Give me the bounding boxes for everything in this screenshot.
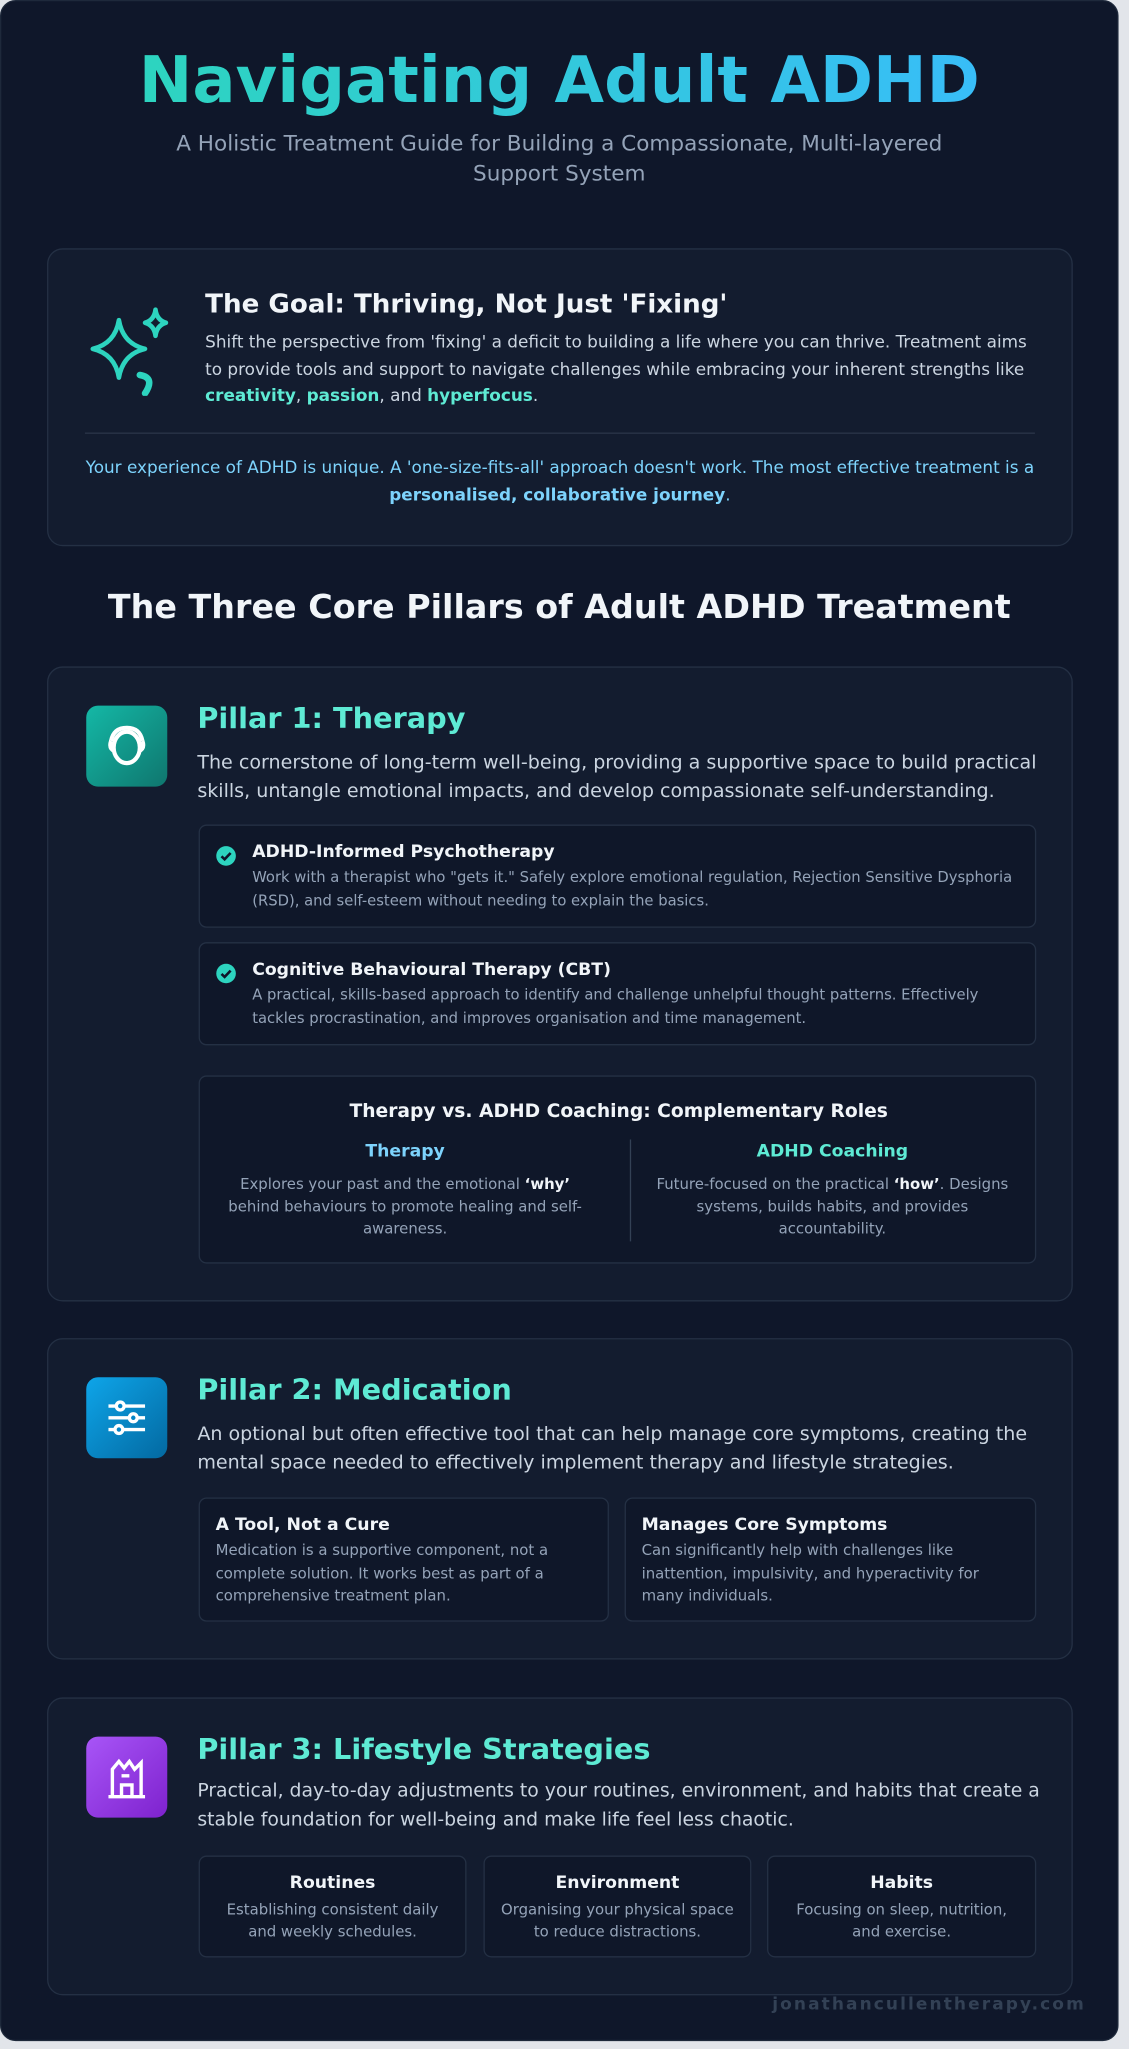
item: core symptoms (625, 1497, 1036, 1622)
panel: pillar 2 medication (47, 1338, 1073, 1660)
item: habits: and exercise. (852, 1922, 951, 1940)
item: environment: to reduce distractions. (534, 1922, 701, 1940)
column: therapy (228, 1142, 582, 1237)
item: habits: Focusing on sleep, nutrition, (796, 1900, 1007, 1918)
item: routines: Establishing consistent daily (227, 1900, 438, 1918)
column: coaching (656, 1142, 1008, 1237)
item: environment (483, 1856, 751, 1957)
heading: pillar 2: Pillar 2: Medication (197, 1375, 512, 1407)
item: CBT: Cognitive Behavioural Therapy (CBT) (252, 960, 611, 980)
column: coaching: ADHD Coaching (757, 1142, 908, 1162)
text: personalised journey: Your experience of ADHD is unique. A 'one-size-fits-all' approach doesn't work. The most effective treatment is a personalised, collaborative journey. (86, 459, 1034, 506)
section heading: The Three Core Pillars of Adult ADHD Treatment (108, 588, 1011, 627)
column: therapy: Therapy (365, 1142, 445, 1162)
icon: check (216, 964, 236, 984)
item: tool not cure: Medication is a supportive component, not a complete solution. It works best as part of a comprehensive treatment plan. (216, 1541, 548, 1605)
item: environment: Organising your physical space (501, 1900, 734, 1918)
item: habits (767, 1856, 1036, 1957)
column: coaching: Future-focused on the practical ‘how’. Designs systems, builds habits, and provides accountability. (656, 1175, 1008, 1237)
item: tool not cure (199, 1497, 609, 1622)
text: pillar 1 desc: The cornerstone of long-term well-being, providing a supportive space to build practical skills, untangle emotional impacts, and develop compassionate self-understanding. (197, 751, 1037, 802)
heading: pillar 3: Pillar 3: Lifestyle Strategies (197, 1734, 650, 1767)
item: routines: Routines (290, 1874, 375, 1893)
footer: website: jonathancullentherapy.com (772, 1995, 1086, 2015)
item: psychotherapy: ADHD-Informed Psychotherapy (252, 843, 555, 862)
text: pillar 2 desc: An optional but often effective tool that can help manage core symptoms, creating the mental space needed to effectively implement therapy and lifestyle strategies. (197, 1423, 1027, 1474)
title: Navigating Adult ADHD (139, 43, 980, 118)
heading: pillar 1: Pillar 1: Therapy (197, 703, 466, 736)
item: habits: Habits (870, 1874, 933, 1893)
item: tool not cure: A Tool, Not a Cure (216, 1516, 390, 1535)
icon: check (216, 846, 236, 866)
item: core symptoms: Manages Core Symptoms (642, 1516, 887, 1535)
item: psychotherapy (199, 825, 1036, 928)
item: psychotherapy: Work with a therapist who "gets it." Safely explore emotional regulation, Rejection Sensitive Dysphoria (RSD), and self-esteem without needing to explain the basics. (252, 869, 1012, 909)
text: goal body: Shift the perspective from 'fixing' a deficit to building a life where you can thrive. Treatment aims to provide tools and support to navigate challenges while embracing your inherent strengths like creativity, passion, and hyperfocus. (205, 333, 1027, 406)
column: therapy: Explores your past and the emotional ‘why’ behind behaviours to promote healing and self-awareness. (228, 1175, 582, 1237)
icon: sliders (86, 1377, 167, 1458)
item: core symptoms: Can significantly help with challenges like inattention, impulsivity, and hyperactivity for many individuals. (642, 1541, 979, 1605)
icon: sparkles (90, 307, 168, 396)
item: CBT: A practical, skills-based approach to identify and challenge unhelpful thought patterns. Effectively tackles procrastination, and improves organisation and time management. (252, 987, 978, 1027)
comparison: therapy vs coaching (199, 1075, 1036, 1264)
heading: goal: The Goal: Thriving, Not Just 'Fixing' (205, 287, 727, 319)
text: pillar 3 desc: Practical, day-to-day adjustments to your routines, environment, and habits that create a stable foundation for well-being and make life feel less chaotic. (197, 1781, 1040, 1830)
icon: house (86, 1737, 167, 1818)
panel: pillar 1 therapy (47, 666, 1073, 1301)
item: environment: Environment (555, 1874, 679, 1893)
item: routines (199, 1856, 466, 1957)
panel: goal (47, 248, 1073, 546)
item: routines: and weekly schedules. (248, 1922, 417, 1940)
panel: pillar 3 lifestyle (47, 1697, 1073, 1995)
item: CBT (199, 942, 1036, 1045)
comparison: therapy vs coaching: Therapy vs. ADHD Coaching: Complementary Roles (350, 1102, 888, 1122)
subtitle: A Holistic Treatment Guide for Building a Compassionate, Multi-layered Support System (176, 131, 942, 186)
icon: therapy head (86, 706, 167, 787)
